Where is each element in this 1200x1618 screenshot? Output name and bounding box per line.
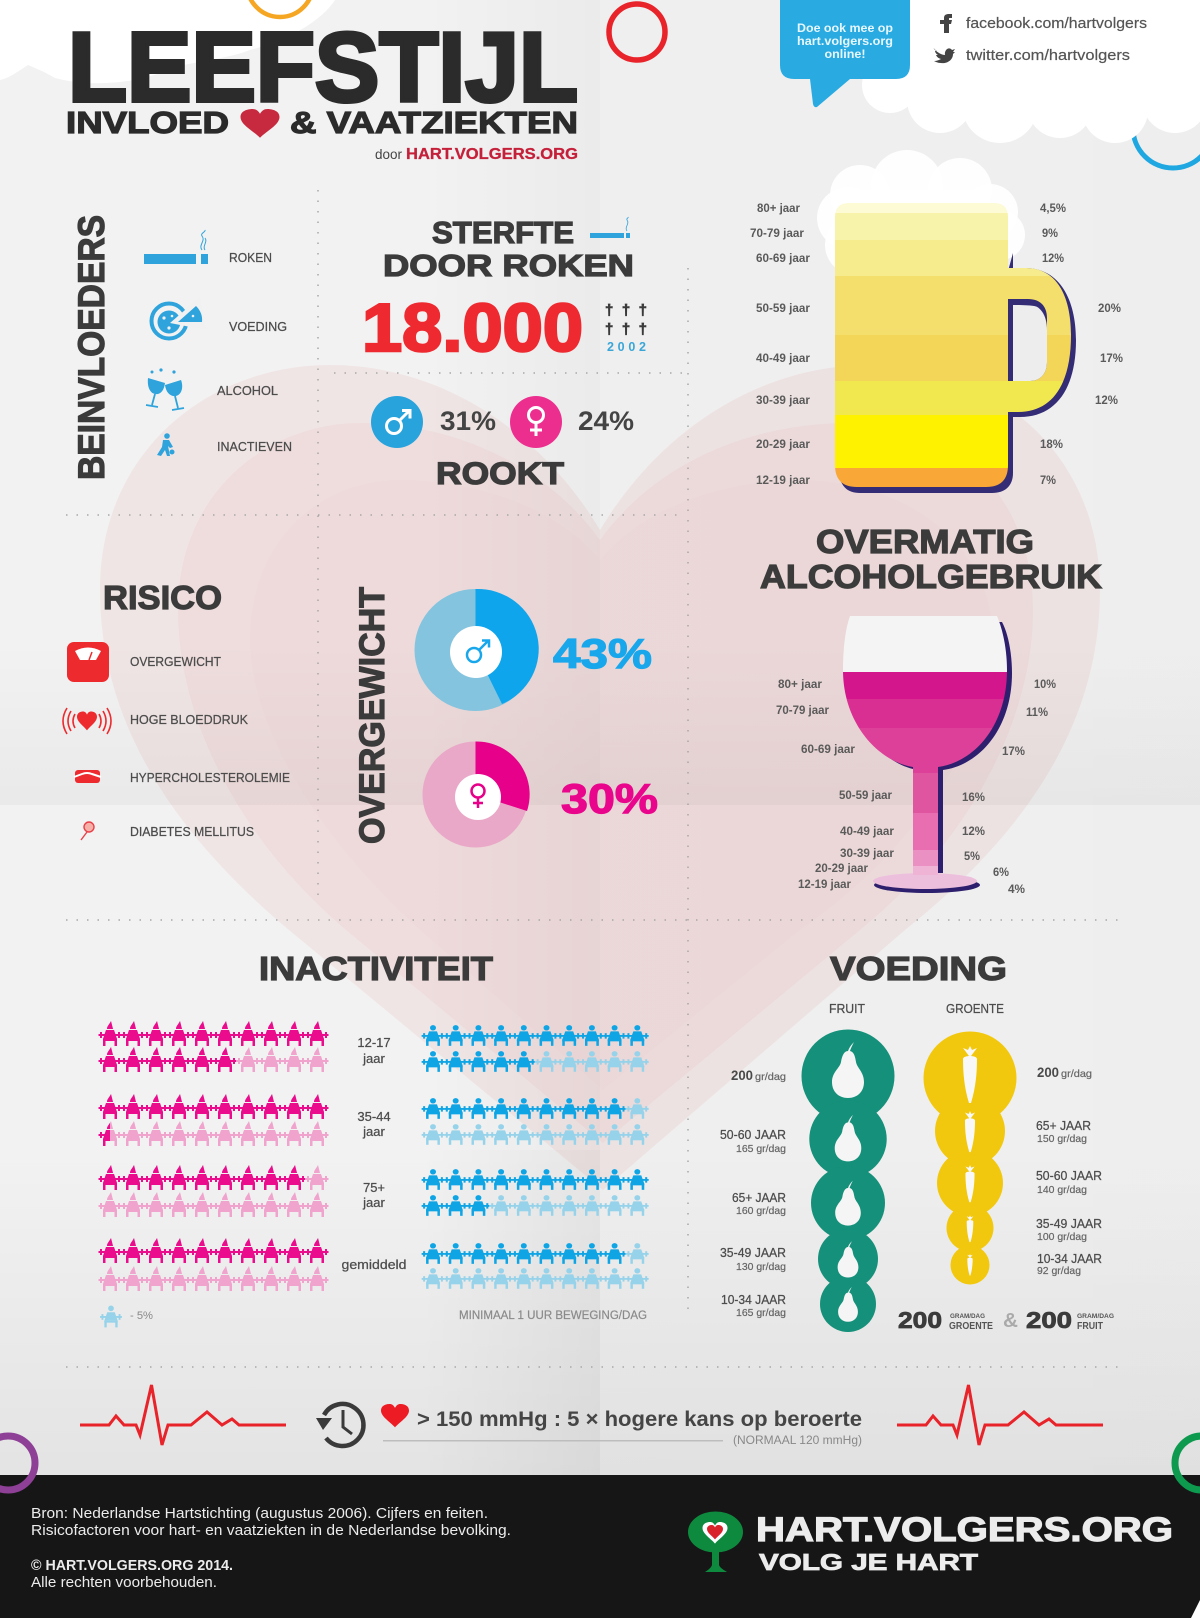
label: roken: ROKEN: [229, 250, 272, 265]
social links: [934, 14, 1147, 64]
age labels: 50-59 jaar: [839, 788, 892, 802]
decorative ring: red: [609, 4, 665, 60]
hole fill: [1013, 305, 1047, 381]
percent labels: 11%: [1026, 705, 1048, 719]
age group labels: 35-44: [357, 1109, 391, 1124]
brand name: HART.VOLGERS.ORG: [756, 1511, 1173, 1549]
heading line 1: OVERMATIG: [816, 523, 1034, 560]
tagline: VOLG JE HART: [759, 1549, 978, 1575]
percent labels: 4,5%: [1040, 201, 1066, 215]
band: blood pressure: [80, 1385, 1103, 1447]
icon: crosses: †††: [605, 321, 647, 338]
fruit labels: 65+ JAAR: [732, 1190, 786, 1205]
label: fruit: FRUIT: [829, 1001, 865, 1016]
panel: inactiviteit: [98, 950, 649, 1327]
wine glass foot: [873, 873, 977, 889]
percent labels: 20%: [1098, 301, 1121, 315]
heartbeat line left: [80, 1385, 286, 1445]
footer band: [0, 1475, 1200, 1618]
icon: title heart: [240, 109, 280, 138]
section dividers: [66, 190, 1122, 1367]
age labels: 20-29 jaar: [815, 861, 868, 875]
age labels: 60-69 jaar: [801, 742, 855, 756]
percent labels: 12%: [1095, 393, 1118, 407]
fruit labels: 35-49 JAAR: [720, 1245, 786, 1260]
panel: beer mug chart: [750, 150, 1123, 493]
daily advice: [898, 1307, 1114, 1333]
daily advice: 200: [898, 1307, 942, 1333]
age labels: 50-59 jaar: [756, 301, 810, 315]
percent labels: 16%: [962, 790, 985, 804]
male percentage: 43%: [553, 630, 652, 677]
percent labels: [1040, 201, 1123, 487]
subtitle: invloed: INVLOED: [66, 105, 229, 140]
age group labels: [342, 1035, 406, 1272]
panel: sterfte door roken: [362, 216, 647, 366]
speech bubble: Doe ook mee op: [797, 23, 893, 35]
title: LEEFSTIJL: LEEFSTIJL: [68, 12, 578, 122]
percent labels: 12%: [1042, 251, 1064, 265]
byline brand: HART.VOLGERS.ORG: [406, 146, 578, 163]
panel: overgewicht: [352, 587, 658, 848]
heartbeat line right: [897, 1385, 1103, 1445]
note: minimum movement: MINIMAAL 1 UUR BEWEGING/DAG: [459, 1310, 647, 1322]
age labels: [776, 677, 894, 891]
heading line 2: ALCOHOLGEBRUIK: [760, 558, 1102, 595]
decorative ring: blue: [1133, 88, 1200, 168]
pictogram: men: [422, 1025, 649, 1289]
foam: [817, 150, 1025, 275]
cloud: top left: [0, 0, 335, 83]
percent labels: 4%: [1008, 882, 1025, 896]
male percentage: 31%: [440, 406, 496, 436]
subtitle: vaatziekten: & VAATZIEKTEN: [290, 105, 578, 140]
heading: voeding: VOEDING: [830, 950, 1007, 987]
fruit labels: 200: [731, 1067, 753, 1083]
speech bubble: online!: [824, 49, 866, 61]
label: overgewicht: OVERGEWICHT: [130, 654, 221, 669]
icon: heart tree: [688, 1512, 743, 1572]
age group labels: jaar: [362, 1051, 386, 1066]
pie: male 43%: [414, 589, 539, 711]
vegetable labels: gr/dag: [1061, 1068, 1092, 1080]
big background heart: [100, 365, 1100, 1190]
mug handle: [1000, 268, 1071, 412]
heading: beinvloeders: BEINVLOEDERS: [71, 215, 112, 480]
age labels: 40-49 jaar: [756, 351, 810, 365]
fruit labels: 50-60 JAAR: [720, 1127, 786, 1142]
icon: male: [371, 396, 423, 448]
label: groente: GROENTE: [946, 1001, 1004, 1016]
number: 18.000: 18.000: [362, 290, 583, 366]
percent labels: 12%: [962, 824, 985, 838]
age group labels: gemiddeld: [342, 1257, 406, 1272]
vegetable labels: 140 gr/dag: [1037, 1184, 1087, 1196]
age labels: 12-19 jaar: [756, 473, 810, 487]
decorative ring: green: [1175, 1436, 1200, 1490]
age group labels: jaar: [362, 1124, 386, 1139]
icon: blood pressure: [63, 708, 111, 734]
fruit chain: [802, 1030, 894, 1332]
heading: inactiviteit: INACTIVITEIT: [259, 950, 493, 987]
panel: voeding: [720, 950, 1114, 1333]
panel: beinvloeders: [71, 215, 292, 480]
vegetable labels: 65+ JAAR: [1036, 1118, 1091, 1133]
icon: crosses: †††: [605, 302, 647, 319]
vegetable labels: 200: [1037, 1064, 1059, 1080]
wine glass body: [843, 616, 1007, 875]
icon: scale: [67, 642, 109, 682]
panel: overmatig alcoholgebruik: [760, 523, 1102, 896]
footer text: © HART.VOLGERS.ORG 2014.: [31, 1558, 233, 1574]
label: inactieven: INACTIEVEN: [217, 439, 292, 454]
footer text: Risicofactoren voor hart- en vaatziekten in de Nederlandse bevolking.: [31, 1523, 511, 1539]
panel: rookt: [371, 396, 634, 491]
percent labels: 17%: [1100, 351, 1123, 365]
heading: risico: RISICO: [103, 579, 222, 616]
fruit labels: gr/dag: [755, 1071, 786, 1083]
icon: small cigarette: [590, 217, 630, 238]
age group labels: 75+: [363, 1180, 385, 1195]
decorative ring: orange: [247, 0, 313, 17]
daily advice: &: [1003, 1310, 1018, 1332]
age labels: 70-79 jaar: [776, 703, 829, 717]
fruit labels: [720, 1067, 786, 1319]
fruit labels: 165 gr/dag: [736, 1143, 786, 1155]
footer logo: [688, 1511, 1173, 1575]
pictogram: women: [98, 1021, 328, 1291]
age group labels: 12-17: [357, 1035, 391, 1050]
vegetable labels: 100 gr/dag: [1037, 1231, 1087, 1243]
wine glass shadow: [848, 622, 1012, 873]
age labels: 80+ jaar: [757, 201, 800, 215]
hole shadow edge: [1008, 299, 1046, 381]
label: voeding: VOEDING: [229, 319, 287, 334]
statement: > 150 mmHg : 5 × hogere kans op beroerte: [417, 1408, 862, 1431]
vegetable labels: [1036, 1064, 1102, 1277]
label: alcohol: ALCOHOL: [217, 383, 278, 398]
wine glass foot shadow: [874, 877, 980, 893]
icon: facebook: [940, 14, 952, 33]
fruit labels: 130 gr/dag: [736, 1261, 786, 1273]
icon: crosses: [605, 302, 647, 338]
percent labels: 9%: [1042, 226, 1058, 240]
heading: overgewicht: OVERGEWICHT: [352, 587, 392, 844]
title block: [66, 12, 578, 163]
label: hypercholesterolemie: HYPERCHOLESTEROLEMIE: [130, 770, 290, 785]
age labels: 80+ jaar: [778, 677, 822, 691]
icon: female: [510, 396, 562, 448]
speech bubble: [780, 0, 910, 107]
legend icon: [100, 1306, 122, 1327]
twitter link: twitter.com/hartvolgers: [966, 47, 1130, 64]
mug shadow: [838, 253, 1076, 493]
fruit labels: 160 gr/dag: [736, 1205, 786, 1217]
icon: twitter: [934, 48, 955, 63]
footer text: Bron: Nederlandse Hartstichting (augustus 2006). Cijfers en feiten.: [31, 1506, 488, 1522]
fruit labels: 165 gr/dag: [736, 1307, 786, 1319]
speech bubble: hart.volgers.org: [797, 36, 893, 48]
panel: risico: [63, 579, 290, 840]
percent labels: [962, 677, 1056, 896]
legend text: - 5%: [130, 1310, 153, 1322]
footer text: [31, 1506, 511, 1591]
facebook link: facebook.com/hartvolgers: [966, 15, 1147, 32]
icon: lollipop: [81, 822, 94, 840]
female percentage: 30%: [561, 775, 658, 822]
age labels: 30-39 jaar: [756, 393, 810, 407]
vegetable labels: 10-34 JAAR: [1037, 1251, 1102, 1266]
age group labels: jaar: [362, 1195, 386, 1210]
age labels: 20-29 jaar: [756, 437, 810, 451]
icon: red heart: [381, 1404, 409, 1427]
daily advice: FRUIT: [1077, 1321, 1103, 1332]
icon: history clock: [316, 1404, 363, 1446]
daily advice: 200: [1026, 1307, 1072, 1333]
percent labels: 10%: [1034, 677, 1056, 691]
percent labels: 18%: [1040, 437, 1063, 451]
vegetable labels: 92 gr/dag: [1037, 1265, 1081, 1277]
percent labels: 17%: [1002, 744, 1025, 758]
note: normal: (NORMAAL 120 mmHg): [733, 1435, 862, 1447]
icon: wine glasses: [146, 369, 184, 410]
byline: door: [375, 147, 402, 162]
heading: sterfte: STERFTE: [432, 216, 574, 250]
age labels: 60-69 jaar: [756, 251, 810, 265]
vegetable labels: 50-60 JAAR: [1036, 1168, 1102, 1183]
vegetable chain: [924, 1032, 1016, 1284]
age labels: 12-19 jaar: [798, 877, 851, 891]
icon: inactive person: [157, 433, 174, 456]
pie: female 30%: [422, 741, 530, 848]
heading: rookt: ROOKT: [436, 455, 564, 491]
female percentage: 24%: [578, 406, 634, 436]
footer text: Alle rechten voorbehouden.: [31, 1575, 217, 1591]
icon: pizza: [152, 297, 206, 338]
daily advice: GROENTE: [949, 1321, 993, 1332]
icon: cigarette: [144, 230, 208, 264]
age labels: 30-39 jaar: [840, 846, 894, 860]
daily advice: GRAM/DAG: [950, 1313, 985, 1320]
underline: [383, 1440, 723, 1442]
icon: cholesterol: [74, 770, 101, 783]
mug body: [835, 203, 1008, 487]
age labels: [750, 201, 810, 487]
corner nick: [1191, 1600, 1200, 1618]
cloud: top right: [862, 0, 1200, 143]
year 2002: 2002: [607, 340, 646, 354]
label: hoge bloeddruk: HOGE BLOEDDRUK: [130, 712, 248, 727]
percent labels: 6%: [993, 865, 1009, 879]
vegetable labels: 150 gr/dag: [1037, 1133, 1087, 1145]
heading: door roken: DOOR ROKEN: [383, 249, 634, 283]
fruit labels: 10-34 JAAR: [721, 1292, 786, 1307]
daily advice: GRAM/DAG: [1077, 1313, 1114, 1320]
percent labels: 7%: [1040, 473, 1056, 487]
age labels: 70-79 jaar: [750, 226, 804, 240]
label: diabetes: DIABETES MELLITUS: [130, 824, 254, 839]
decorative ring: purple: [0, 1436, 35, 1490]
percent labels: 5%: [964, 849, 980, 863]
vegetable labels: 35-49 JAAR: [1036, 1216, 1102, 1231]
age labels: 40-49 jaar: [840, 824, 894, 838]
